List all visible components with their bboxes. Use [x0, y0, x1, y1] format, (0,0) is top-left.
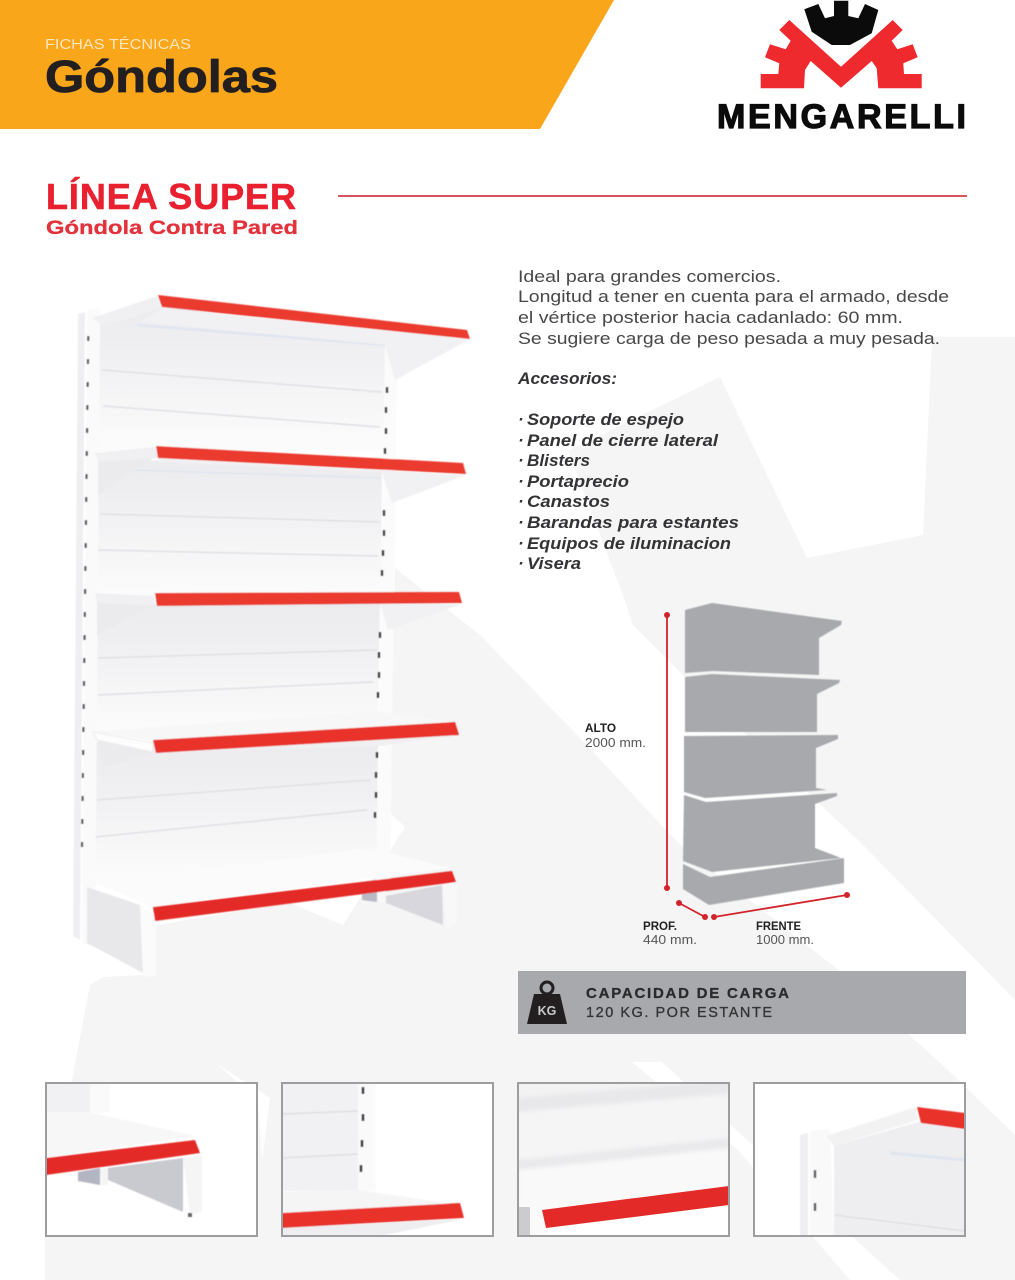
section heading [46, 176, 298, 239]
red price rail 3 [155, 592, 462, 606]
label: alto [585, 723, 646, 750]
label: prof [643, 921, 697, 947]
accessories items: · [518, 472, 524, 491]
accessories items: · [518, 554, 524, 573]
red price rail 1 [158, 295, 470, 339]
accessories items: · [518, 513, 524, 532]
base shelf [87, 848, 457, 977]
banner kicker: FICHAS TÉCNICAS [45, 36, 191, 53]
heading title: LÍNEA SUPER [46, 176, 296, 217]
gondola silhouette [683, 603, 844, 905]
description text: Ideal para grandes comercios. [518, 268, 781, 286]
accessories items: · [518, 431, 524, 450]
back panel [95, 305, 385, 885]
load capacity bar [518, 971, 966, 1034]
accessories heading: Accesorios: [517, 369, 617, 388]
label: alto: ALTO [585, 723, 616, 735]
label: alto: 2000 mm. [585, 736, 646, 750]
dimension diagram [585, 603, 850, 947]
thumbnail 4: top corner detail [754, 1083, 965, 1236]
accessories items: · [518, 492, 524, 511]
accessories items: Equipos de iluminacion [527, 534, 731, 553]
capacity value: 120 KG. POR ESTANTE [586, 1005, 772, 1021]
accessories items: Canastos [527, 492, 610, 511]
icon: kg weight [527, 982, 567, 1024]
description text: el vértice posterior hacia cadanlado: 60 mm. [518, 309, 903, 327]
red price rail 5 [153, 871, 456, 921]
label: frente [756, 921, 814, 947]
accessories items: Portaprecio [527, 472, 629, 491]
label: prof: 440 mm. [643, 933, 697, 947]
logo wordmark: MENGARELLI [717, 98, 966, 136]
accessories items: Visera [527, 554, 581, 573]
label: frente: 1000 mm. [756, 933, 814, 947]
shelf 3 [95, 592, 462, 635]
icon: kg weight: KG [538, 1004, 556, 1018]
banner title: Góndolas [45, 51, 278, 102]
accessories items: · [518, 451, 524, 470]
logo crown [804, 1, 878, 45]
dimension lines [664, 612, 850, 920]
red price rail 4 [153, 722, 459, 753]
accessories items: · [518, 410, 524, 429]
red price rail 2 [156, 446, 466, 474]
background watermark [45, 337, 1015, 1280]
description text: Se sugiere carga de peso pesada a muy pesada. [518, 330, 940, 348]
header banner [0, 0, 614, 129]
logo gear M [761, 20, 922, 88]
accessories items: · [518, 534, 524, 553]
thumbnail 3: shelf rail close-up [518, 1080, 729, 1236]
accessories items [518, 410, 739, 573]
capacity title: CAPACIDAD DE CARGA [586, 985, 789, 1002]
left uprights [73, 312, 85, 940]
description text: Longitud a tener en cuenta para el armado, desde [518, 288, 949, 306]
logo: Mengarelli [717, 1, 966, 136]
main product image: shelving unit [73, 295, 470, 977]
label: frente: FRENTE [756, 921, 801, 933]
accessories items: Panel de cierre lateral [527, 431, 719, 450]
right upright [377, 340, 397, 880]
shelf 4 [93, 711, 459, 767]
thumbnail 1: shelf base detail [46, 1083, 257, 1236]
thumbnail 2: upright detail [282, 1083, 493, 1236]
accessories items: Soporte de espejo [527, 410, 684, 429]
description text [518, 268, 949, 348]
accessories list [517, 369, 739, 573]
label: prof: PROF. [643, 921, 677, 933]
shelf 1 [92, 295, 470, 380]
shelf 2 [95, 446, 466, 503]
heading subtitle: Góndola Contra Pared [46, 217, 298, 239]
accessories items: Barandas para estantes [527, 513, 739, 532]
accessories items: Blisters [527, 451, 590, 470]
